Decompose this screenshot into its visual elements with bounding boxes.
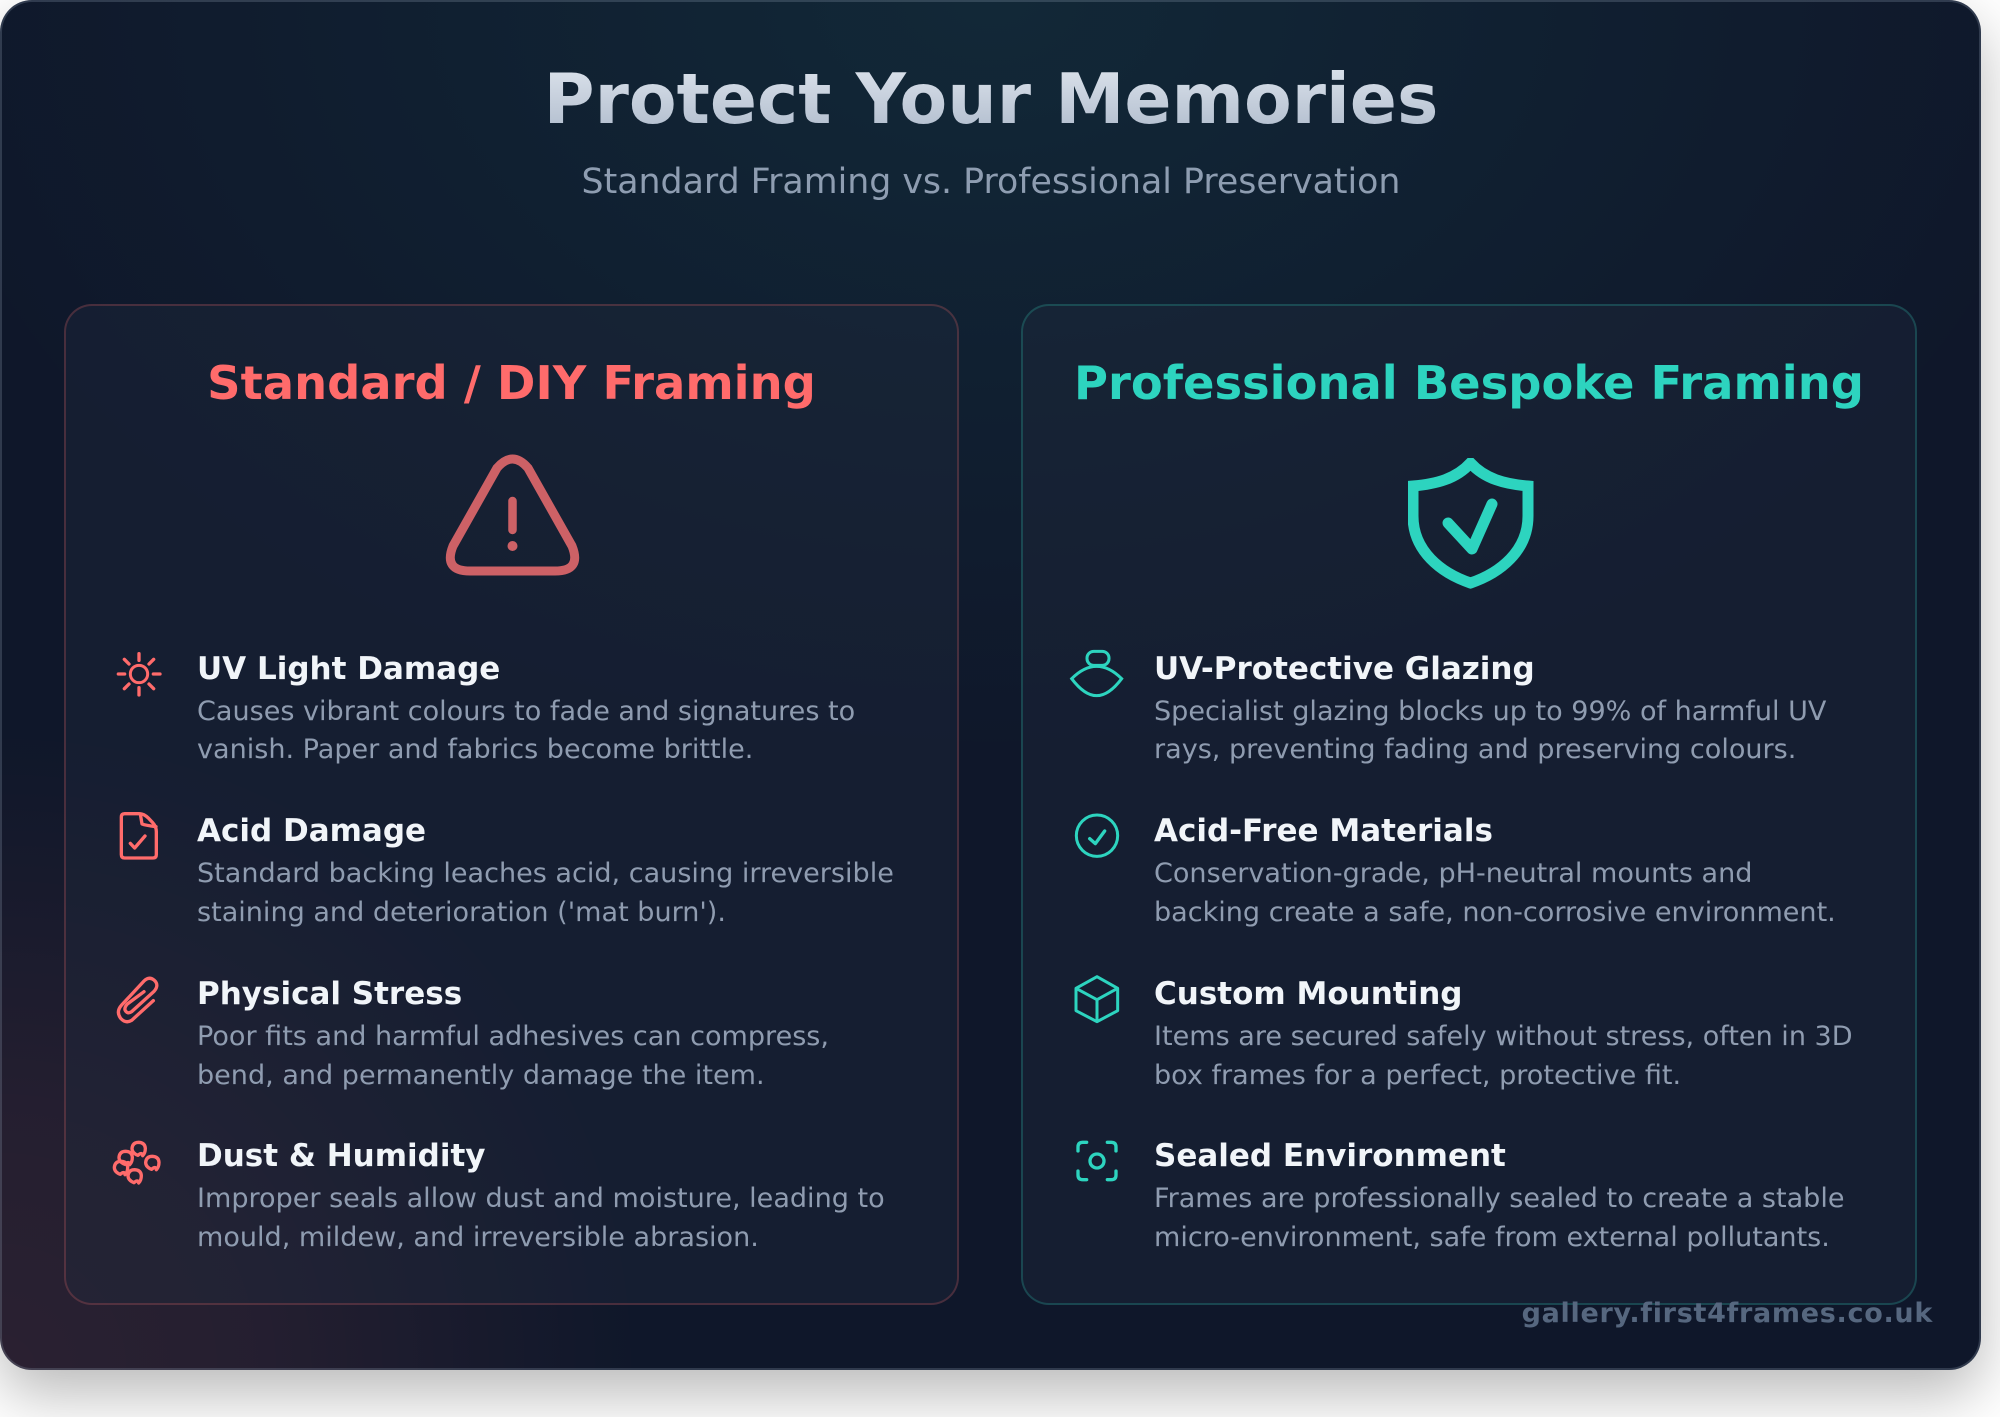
icon: glazing lens — [1070, 650, 1124, 698]
item description: box frames for a perfect, protective fit. — [1154, 1060, 1681, 1091]
icon: warning triangle — [446, 454, 580, 576]
item description — [197, 858, 894, 928]
item description: Frames are professionally sealed to create a stable — [1154, 1183, 1844, 1214]
item title: Dust & Humidity — [197, 1138, 485, 1174]
icon: sealed focus frame — [1076, 1140, 1118, 1182]
item title: UV Light Damage — [197, 650, 500, 686]
icon: dust particles — [112, 1140, 161, 1185]
footer website: gallery.first4frames.co.uk — [1522, 1298, 1933, 1329]
item description: Causes vibrant colours to fade and signatures to — [197, 696, 855, 726]
item: custom mounting — [1074, 975, 1853, 1091]
title — [2, 54, 1980, 146]
item description: micro-environment, safe from external pollutants. — [1154, 1222, 1830, 1253]
item title: UV-Protective Glazing — [1154, 650, 1535, 686]
item title: Custom Mounting — [1154, 976, 1462, 1012]
item description — [197, 696, 855, 765]
item: UV-protective glazing — [1070, 650, 1826, 765]
icon: document with check — [120, 812, 158, 860]
item description — [197, 1021, 829, 1091]
item: acid-free materials — [1074, 813, 1836, 928]
item description — [1154, 1183, 1844, 1253]
item description: mould, mildew, and irreversible abrasion. — [197, 1222, 759, 1253]
icon: cube — [1074, 975, 1120, 1024]
item description: backing create a safe, non-corrosive environment. — [1154, 897, 1836, 928]
item description: Standard backing leaches acid, causing irreversible — [197, 858, 894, 889]
item title: Acid Damage — [197, 813, 426, 849]
icon: check circle — [1074, 814, 1120, 858]
icon: sun — [116, 652, 162, 697]
item: physical stress — [116, 976, 829, 1091]
item title: Physical Stress — [197, 976, 462, 1012]
item description: bend, and permanently damage the item. — [197, 1060, 765, 1091]
item: UV light damage — [116, 650, 855, 765]
panel heading: Standard / DIY Framing — [207, 356, 816, 410]
panel heading: Professional Bespoke Framing — [1074, 356, 1864, 410]
item description: Specialist glazing blocks up to 99% of harmful UV — [1154, 696, 1826, 726]
item description: Improper seals allow dust and moisture, leading to — [197, 1183, 885, 1214]
subtitle: Standard Framing vs. Professional Preservation — [582, 162, 1400, 202]
item description — [197, 1183, 885, 1253]
item description: Items are secured safely without stress, often in 3D — [1154, 1021, 1853, 1052]
item description: Conservation-grade, pH-neutral mounts and — [1154, 858, 1752, 889]
title: Protect Your Memories — [544, 59, 1438, 140]
item title: Sealed Environment — [1154, 1138, 1506, 1174]
panel: standard / DIY framing — [64, 304, 959, 1305]
item description: rays, preventing fading and preserving colours. — [1154, 734, 1796, 765]
item description — [1154, 1021, 1853, 1091]
item description: staining and deterioration ('mat burn'). — [197, 897, 726, 928]
panel: professional bespoke framing — [1021, 304, 1917, 1305]
item description — [1154, 858, 1836, 928]
item: sealed environment — [1076, 1138, 1844, 1253]
item title: Acid-Free Materials — [1154, 813, 1493, 849]
item description: Poor fits and harmful adhesives can compress, — [197, 1021, 829, 1052]
item description — [1154, 696, 1826, 765]
item: acid damage — [120, 812, 894, 928]
item: dust and humidity — [112, 1138, 885, 1253]
item description: vanish. Paper and fabrics become brittle. — [197, 734, 753, 765]
icon: paperclip — [116, 976, 158, 1024]
icon: shield with check — [1408, 458, 1534, 589]
